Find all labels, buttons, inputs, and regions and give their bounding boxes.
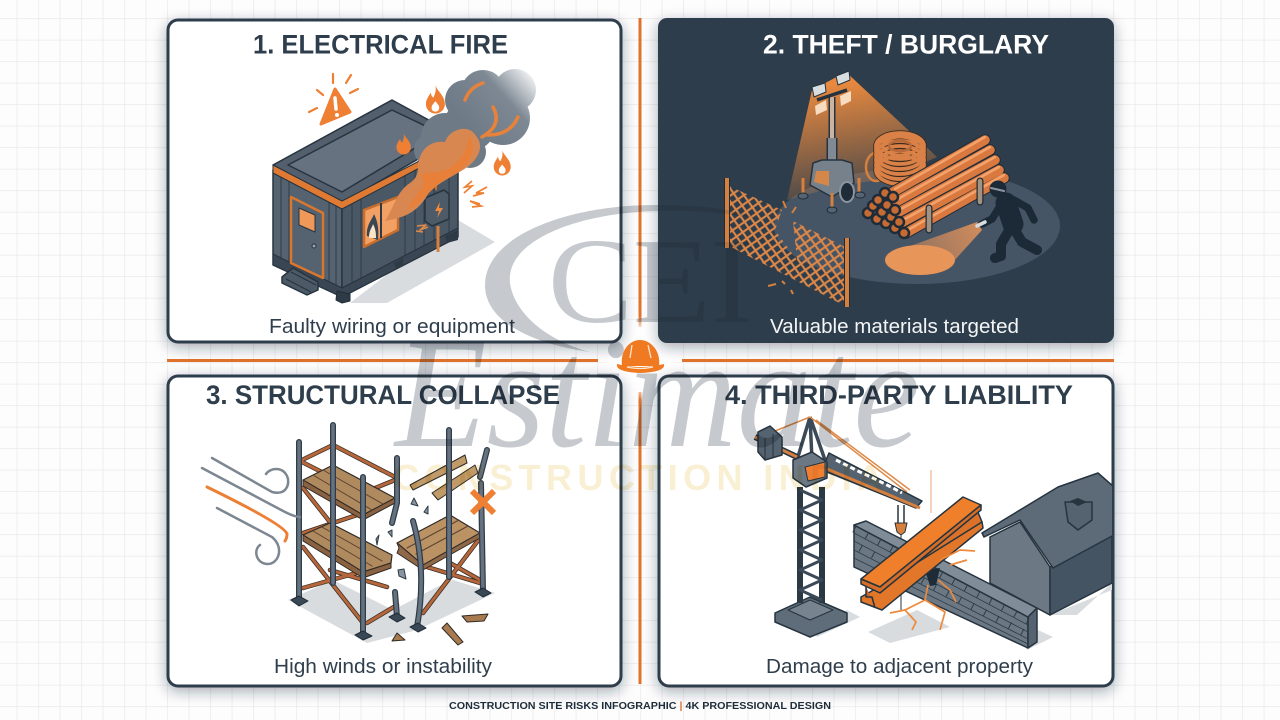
illuminated ground bbox=[774, 168, 1060, 284]
panel 4: third-party liability bbox=[659, 376, 1114, 686]
panel 2 heading: 2. THEFT / BURGLARY bbox=[763, 30, 1049, 60]
centre divider: vertical and horizontal lines bbox=[167, 18, 1114, 684]
flashlight beam bbox=[885, 222, 982, 275]
panel 2 caption: Valuable materials targeted bbox=[770, 316, 1019, 338]
panel 3: structural collapse bbox=[168, 376, 621, 686]
site office cabin illustration bbox=[273, 100, 495, 303]
icon: orange X bbox=[472, 491, 494, 513]
panel 2: theft / burglary bbox=[658, 18, 1114, 343]
faint marker line bbox=[930, 470, 932, 513]
panel 3 heading: 3. STRUCTURAL COLLAPSE bbox=[206, 380, 560, 410]
impact cracks bbox=[890, 550, 975, 630]
smoke plume with flames bbox=[385, 69, 536, 221]
panel 4 caption: Damage to adjacent property bbox=[766, 656, 1033, 678]
panel 2 card bbox=[658, 18, 1114, 343]
thief silhouette bbox=[977, 180, 1037, 258]
icon: hard hat bbox=[617, 340, 664, 373]
watermark CEI letters: CEI bbox=[548, 214, 753, 349]
watermark logo bbox=[393, 205, 920, 498]
orange steel I-beam bbox=[861, 497, 983, 610]
watermark Estimate script: Estimate bbox=[393, 306, 920, 481]
mobile light tower bbox=[798, 71, 865, 213]
footer caption: CONSTRUCTION SITE RISKS INFOGRAPHIC | 4K PROFESSIONAL DESIGN bbox=[449, 700, 831, 712]
centre white glow bbox=[598, 316, 682, 400]
panel 3 card bbox=[168, 376, 621, 686]
chain-link fence with torn hole bbox=[727, 178, 847, 307]
watermark swoosh ellipse bbox=[485, 205, 755, 352]
tower crane bbox=[755, 417, 935, 637]
wind lines bbox=[202, 458, 300, 564]
panel 1 card bbox=[168, 20, 621, 342]
panel 4 card bbox=[659, 376, 1113, 686]
panel 3 caption: High winds or instability bbox=[274, 656, 492, 678]
brick wall bbox=[854, 521, 1037, 648]
panel 1 heading: 1. ELECTRICAL FIRE bbox=[253, 30, 508, 60]
copper pipe stack bbox=[863, 137, 1004, 238]
tower light beam bbox=[787, 72, 937, 200]
house bbox=[982, 473, 1114, 615]
icon: warning triangle bbox=[309, 74, 358, 124]
panel 1 caption: Faulty wiring or equipment bbox=[269, 316, 515, 338]
panel 1: electrical fire bbox=[168, 20, 621, 342]
cable coil bbox=[866, 133, 924, 184]
ground shadows bbox=[812, 583, 1112, 650]
icon: electric sparks bbox=[464, 181, 487, 207]
panel 4 heading: 4. THIRD-PARTY LIABILITY bbox=[725, 380, 1073, 410]
icon: flames bbox=[396, 85, 511, 176]
collapsing scaffold illustration bbox=[288, 425, 495, 645]
watermark Construction India: CONSTRUCTION INDIA bbox=[393, 457, 883, 498]
